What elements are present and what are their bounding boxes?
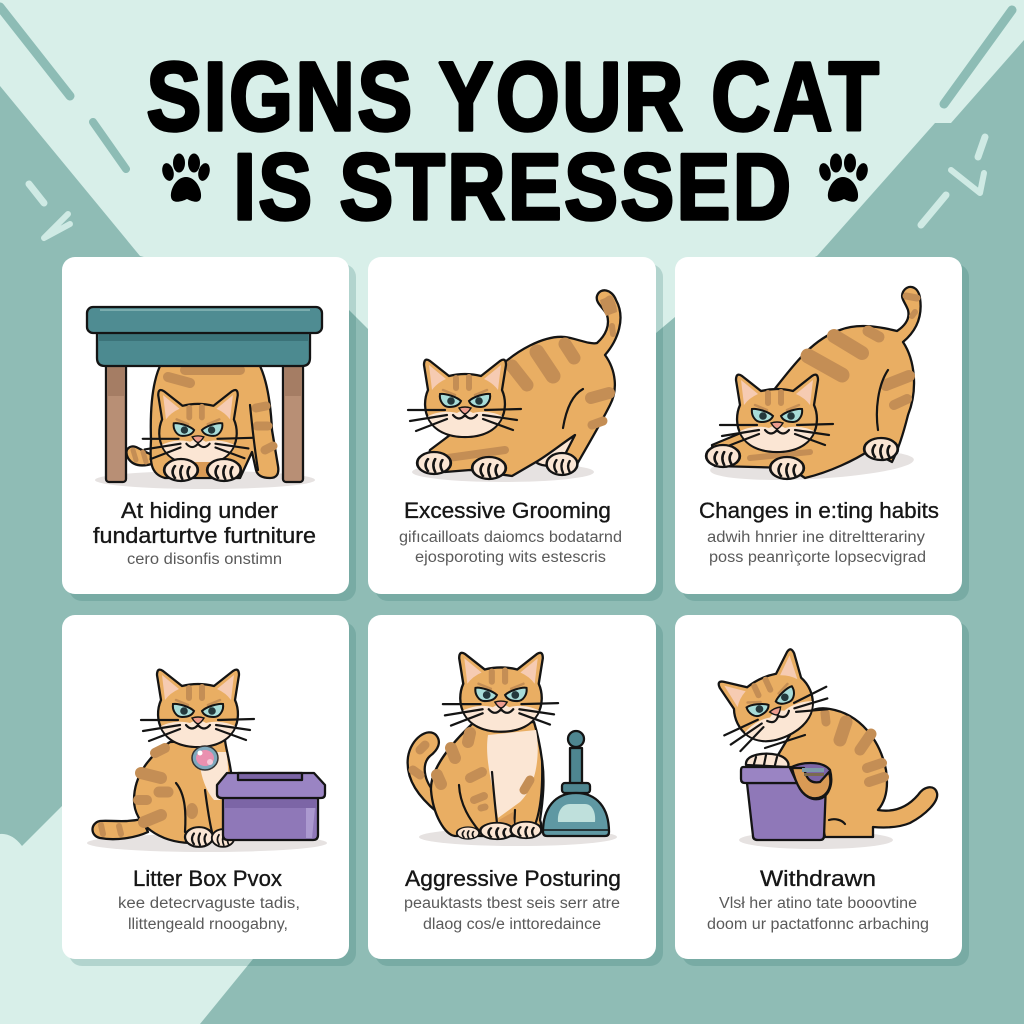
title: IS STRESSED	[234, 134, 794, 239]
flower collar tag	[192, 746, 218, 770]
cat head	[143, 390, 252, 465]
description: llittengeald rnoogabny,	[128, 916, 288, 933]
heading: fundarturtve furtniture	[93, 523, 316, 548]
cat and litter box illustration	[87, 670, 327, 852]
description	[118, 895, 300, 933]
panel: excessive grooming	[368, 257, 663, 601]
paws on box	[746, 754, 788, 767]
cat head	[720, 375, 833, 452]
description	[404, 895, 620, 933]
heading: Excessive Grooming	[404, 498, 611, 523]
heading: At hiding under	[121, 498, 278, 523]
crouching cat illustration	[408, 290, 620, 482]
title: SIGNS YOUR CAT	[146, 42, 882, 151]
description: doom ur pactatfonnc arbaching	[707, 916, 929, 933]
cat head	[443, 653, 558, 732]
icon: left paw print	[160, 154, 212, 202]
panel: aggressive posturing	[368, 615, 663, 966]
heading: Changes in e:ting habits	[699, 498, 939, 523]
heading: Aggressive Posturing	[405, 866, 621, 891]
litter box	[217, 773, 325, 840]
description: cero disonfis onstimn	[127, 551, 282, 568]
description: ejosporoting wits estescris	[415, 549, 606, 566]
heading: Litter Box Pvox	[133, 866, 282, 891]
heading	[93, 498, 316, 548]
panel: hiding under furniture	[62, 257, 356, 601]
sitting cat and scoop illustration	[408, 653, 617, 846]
description: Vlsł her atino tate booovtine	[719, 895, 917, 912]
description	[707, 529, 926, 566]
paws	[457, 822, 541, 839]
front paws	[164, 459, 241, 481]
title	[146, 42, 882, 239]
description	[707, 895, 929, 933]
cat head	[408, 360, 521, 437]
icon: right paw print	[817, 154, 870, 202]
panel: changes in eating habits	[675, 257, 969, 601]
cat head	[703, 642, 838, 760]
heading: Withdrawn	[760, 866, 876, 891]
panel: litter box	[62, 615, 356, 966]
description: poss peanrìçorte lopsecvigrad	[709, 549, 926, 566]
scoop tool	[543, 731, 609, 836]
description: kee detecrvaguste tadis,	[118, 895, 300, 912]
stretching cat illustration	[706, 287, 921, 484]
paws	[185, 827, 234, 847]
panel: withdrawn	[675, 615, 969, 966]
cat under table illustration	[87, 307, 322, 489]
description: adwih hnrier ine ditreltterariny	[707, 529, 925, 546]
description: peauktasts tbest seis serr atre	[404, 895, 620, 912]
description	[399, 529, 622, 566]
description: gifıcailloats daiomcs bodatarnd	[399, 529, 622, 546]
purple box	[741, 763, 831, 840]
paws	[706, 438, 898, 479]
cat head	[141, 670, 254, 747]
paws	[417, 452, 577, 479]
description: dlaog cos/e inttoredaince	[423, 916, 601, 933]
cat over purple box illustration	[703, 642, 937, 849]
